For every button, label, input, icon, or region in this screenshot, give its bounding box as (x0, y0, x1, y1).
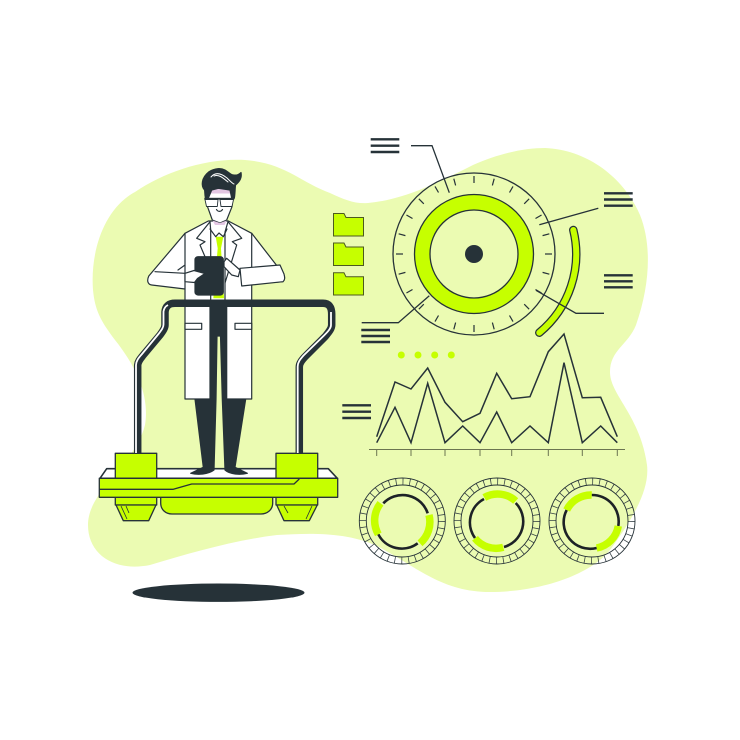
coat side seams (155, 233, 252, 289)
skin shadow (211, 188, 230, 225)
label icon 1 (371, 139, 399, 152)
coat front lines (211, 270, 225, 306)
pockets (185, 323, 252, 329)
gauge center dot (465, 245, 483, 263)
smile (216, 210, 222, 211)
gauge lime ring (414, 194, 534, 314)
right hand (224, 258, 240, 277)
handrail (136, 303, 332, 453)
outer scale (549, 478, 635, 564)
platform (99, 453, 338, 521)
outer scale (454, 478, 540, 564)
donut gauge 1 (359, 478, 445, 564)
right foot (276, 497, 318, 521)
label icon 5 (342, 405, 371, 418)
line chart (369, 334, 625, 456)
hair (202, 169, 241, 198)
lime arc (539, 230, 576, 333)
right post block (276, 453, 318, 478)
platform front bar (99, 478, 338, 497)
dark arcs (470, 499, 523, 547)
floor shadow (132, 584, 304, 602)
lapels (197, 222, 242, 283)
leader 2 (539, 208, 598, 225)
legs and shoes (191, 300, 247, 474)
folder icons (334, 214, 364, 295)
left post block (115, 453, 157, 478)
tie (213, 237, 224, 298)
left foot (115, 497, 157, 521)
collar (210, 229, 227, 237)
gauge outer ring (393, 173, 555, 335)
dark arcs (564, 495, 619, 549)
face (208, 184, 232, 223)
clipboard tablet (195, 257, 223, 295)
outer scale (359, 478, 445, 564)
lab coat (148, 221, 285, 399)
leader 4 (362, 296, 429, 323)
lime arcs (475, 494, 516, 548)
leader 1 (411, 146, 449, 193)
background blob (88, 148, 648, 592)
dark arcs (378, 495, 428, 549)
donut gauge 3 (549, 478, 635, 564)
hair highlight (211, 174, 234, 184)
left hand (185, 270, 205, 282)
lime arcs (375, 503, 430, 543)
glasses (204, 198, 234, 206)
donut gauge 2 (454, 478, 540, 564)
lime arcs (567, 495, 618, 548)
upper line (377, 334, 617, 437)
label icon 3 (604, 275, 633, 287)
gauge ticks (396, 176, 552, 332)
leader 3 (536, 290, 604, 313)
platform deck (100, 469, 337, 478)
folder 3 (334, 273, 364, 295)
folder 1 (334, 214, 364, 236)
circular gauge (393, 173, 555, 335)
right cuff (240, 265, 285, 286)
legend dots (398, 352, 455, 358)
scientist (148, 169, 285, 474)
label icon 2 (604, 193, 633, 206)
label icon 4 (361, 330, 390, 342)
chart axis (369, 450, 625, 456)
label icons (342, 139, 633, 418)
lower line (377, 363, 617, 443)
center underbody (161, 497, 273, 514)
leader lines (362, 146, 604, 323)
folder 2 (334, 243, 364, 266)
